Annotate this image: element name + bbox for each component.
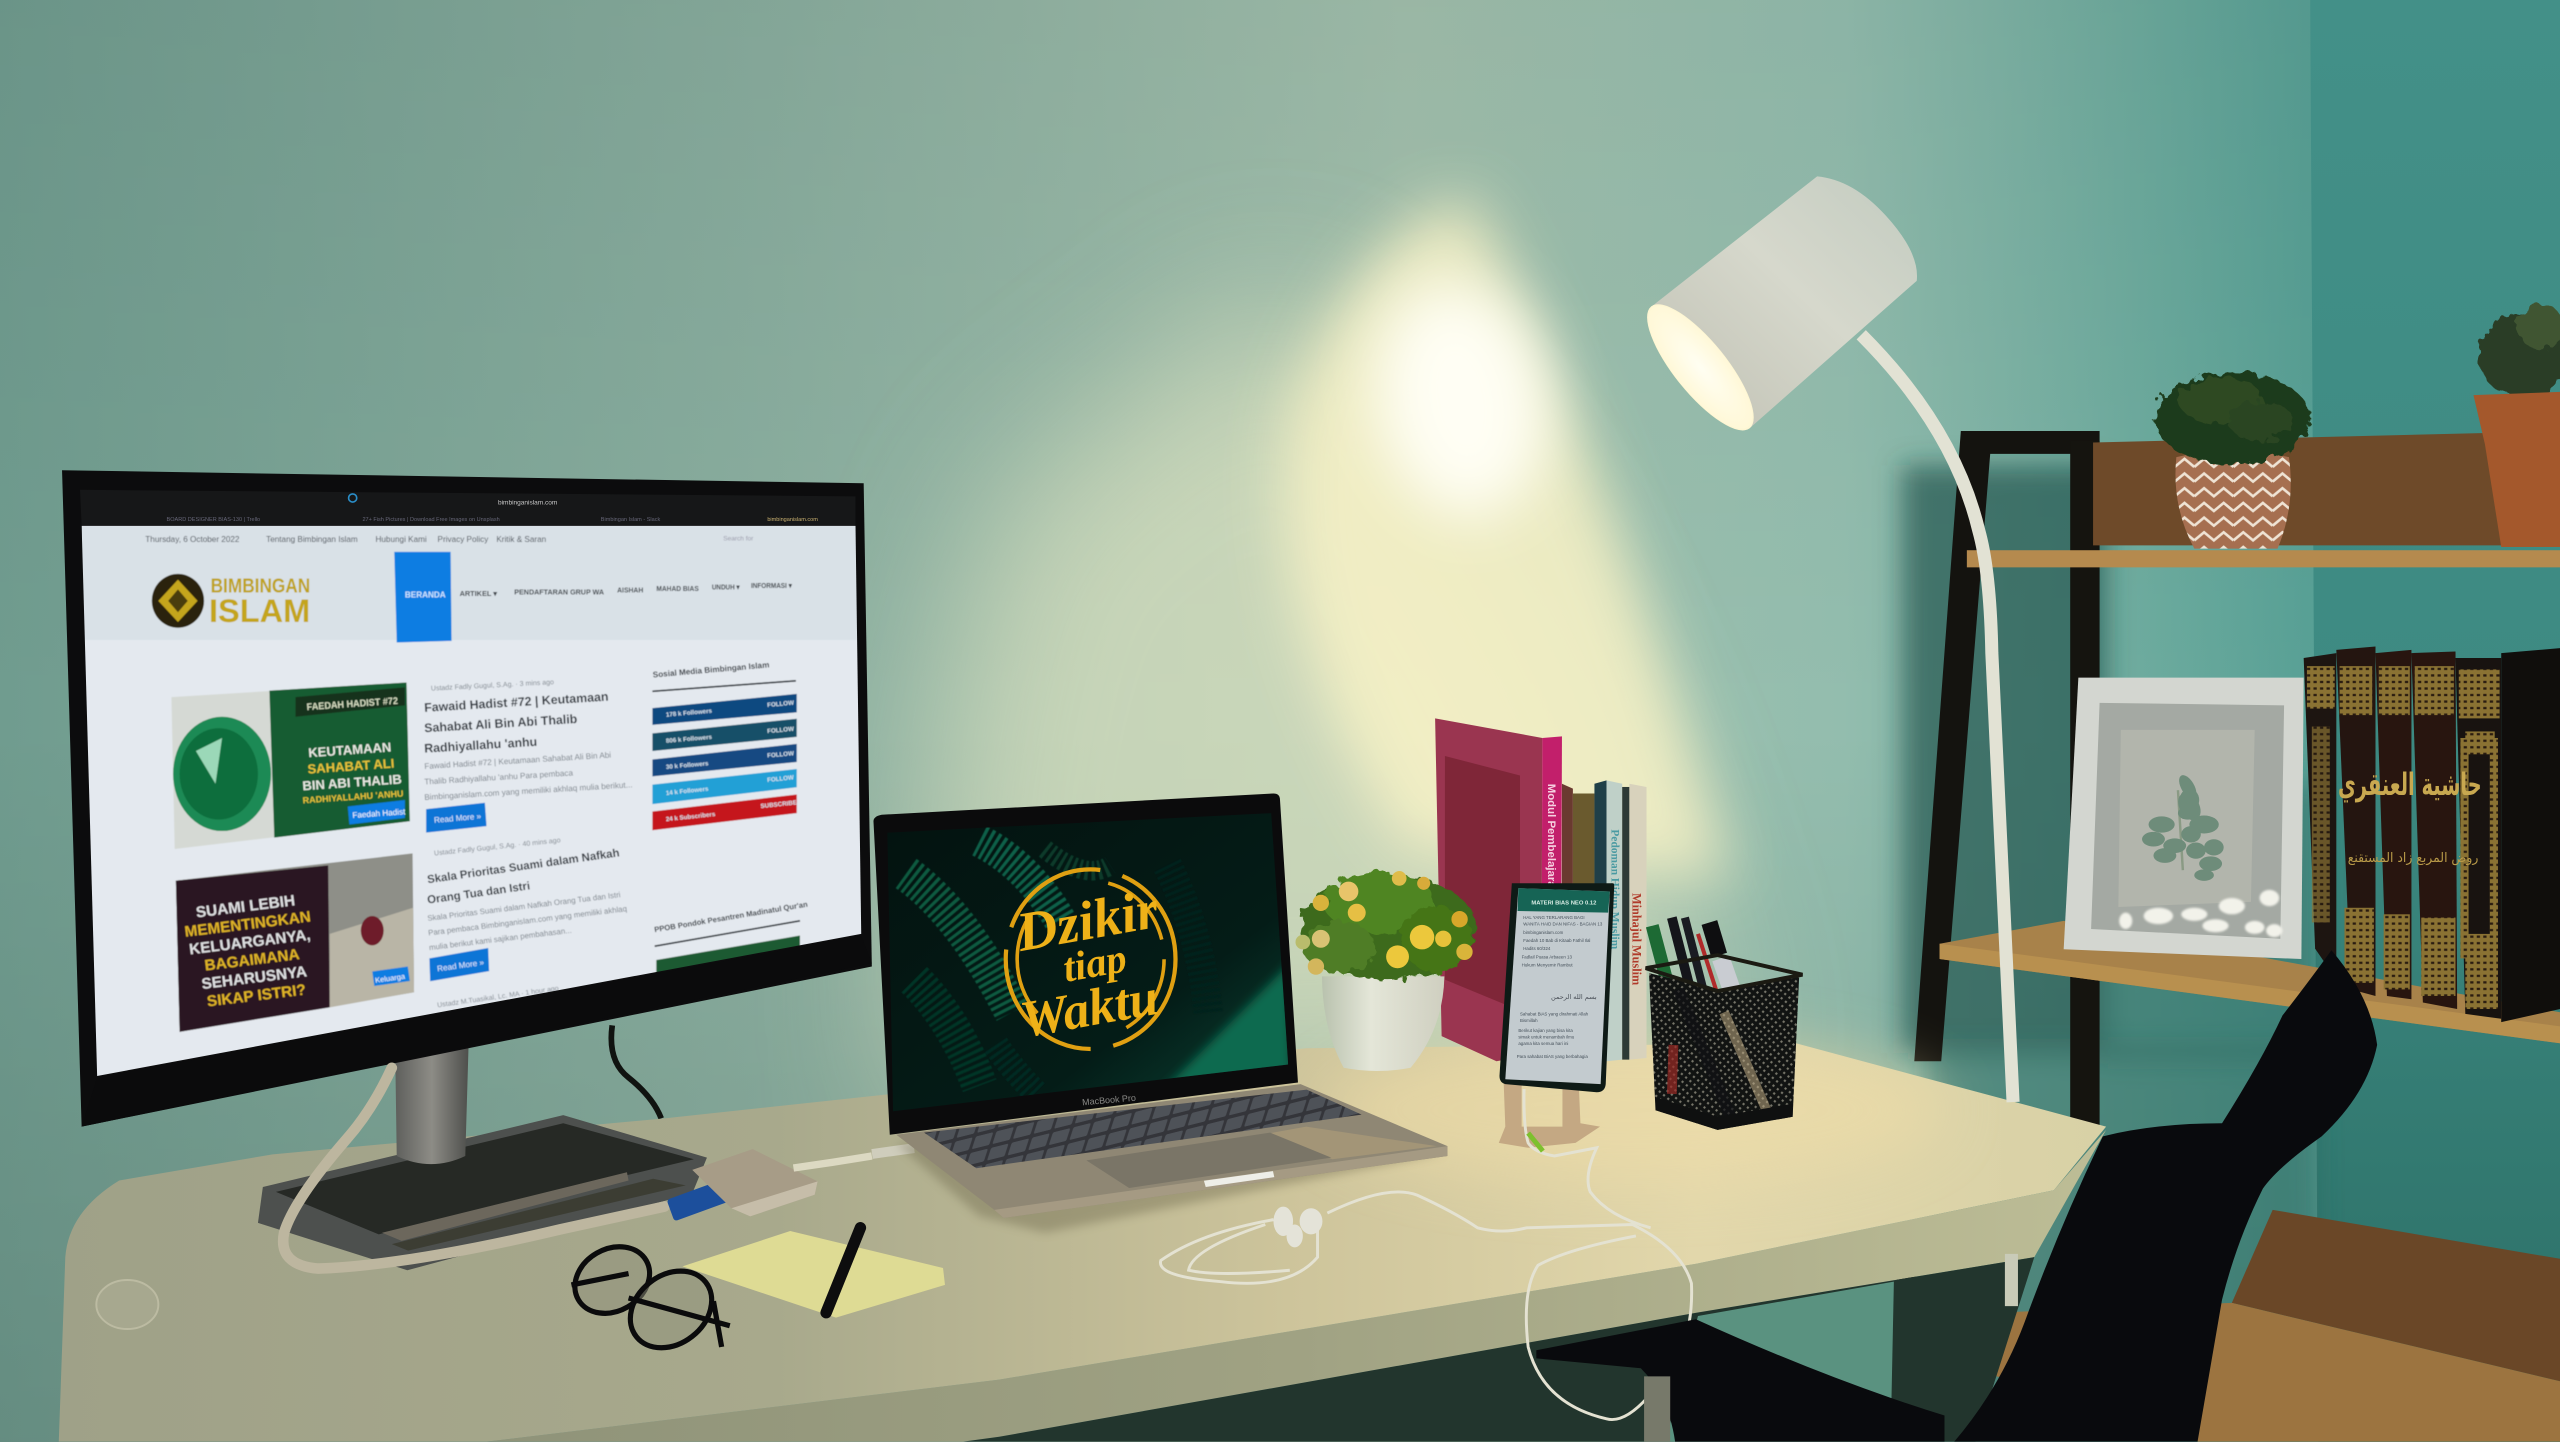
- social media sidebar: FOLLOW: [767, 750, 794, 760]
- keyboard: [924, 1090, 1362, 1168]
- chat text: [1517, 915, 1603, 1059]
- window light spots: [2119, 890, 2282, 937]
- nav: [460, 582, 792, 596]
- nav: UNDUH ▾: [712, 582, 740, 591]
- side wall corner: [2310, 0, 2560, 1442]
- desk warm light: [1322, 1037, 1943, 1184]
- article 2 image: Keluarga: [375, 972, 406, 985]
- laptop base: [896, 1084, 1448, 1218]
- article 1 text: Radhiyallahu 'anhu: [424, 735, 538, 756]
- article 1 image: FAEDAH HADIST #72: [306, 696, 399, 713]
- social media sidebar: 806 k Followers: [666, 734, 713, 745]
- browser toolbar: [80, 490, 856, 526]
- lower frame legs: [1889, 1277, 1930, 1388]
- fern fronds: [906, 841, 1208, 1094]
- web page: BERANDA: [405, 591, 446, 600]
- dzikir tiap waktu logo: tiap: [1060, 935, 1130, 991]
- plant: chevron pot: [2153, 372, 2310, 549]
- article 2 text: [427, 837, 627, 952]
- pens through mesh: [1678, 989, 1731, 1117]
- top bar text: Hubungi Kami: [376, 535, 427, 544]
- chat text: Para sahabat BiAS yang berbahagia: [1517, 1054, 1588, 1059]
- article 1 text: [424, 679, 633, 802]
- office chair: [1536, 950, 2377, 1442]
- monitor stand: [258, 1045, 707, 1270]
- cable grommet: [96, 1280, 158, 1329]
- terracotta pot: [2473, 392, 2560, 547]
- glasses: [563, 1234, 730, 1364]
- phone stand: [1499, 1082, 1600, 1148]
- shelf frame: left leg: [1914, 431, 2100, 1061]
- article 2 text: Para pembaca Bimbinganislam.com yang memiliki akhlaq: [428, 904, 627, 938]
- mesh cup: [1649, 973, 1799, 1130]
- spine titles: Pedoman Hidup Muslim: [1608, 829, 1620, 950]
- chat text: Hukum Menyemir Rambut: [1522, 963, 1573, 968]
- phone and earphone cables: [1160, 1089, 1692, 1420]
- stack of books: Minhajul Muslim: [1630, 893, 1644, 985]
- monitor: [62, 470, 882, 1127]
- article 1 image: Faedah Hadist: [352, 807, 406, 820]
- chat text: simak untuk menambah ilmu: [1518, 1034, 1575, 1039]
- flowers: [1296, 871, 1473, 975]
- plant: succulent in terracotta pot: [2473, 304, 2560, 547]
- desk front edge: [487, 1130, 2106, 1442]
- blurred leaf lower right: [1143, 963, 1290, 1110]
- trackpad: [1086, 1133, 1331, 1188]
- monitor: bimbinganislam.com: [767, 517, 818, 523]
- top bar text: Tentang Bimbingan Islam: [266, 535, 358, 544]
- frame shadow on wall: [1902, 465, 2320, 1437]
- shelf frame: right post: [2070, 441, 2100, 1127]
- wallpaper: [873, 800, 1298, 1127]
- gold ornaments: [2307, 666, 2500, 1009]
- slipcase: [2501, 648, 2560, 1022]
- hub body: [692, 1149, 818, 1216]
- article 2 image: SUAMI LEBIH: [195, 892, 296, 921]
- social media sidebar: 30 k Followers: [666, 760, 709, 771]
- toolbar text: bimbinganislam.com: [498, 500, 557, 507]
- arabic book set: روض المربع زاد المستقنع: [2348, 851, 2478, 866]
- nav: ARTIKEL ▾: [460, 589, 497, 598]
- article 1 text: Thalib Radhiyallahu 'anhu Para pembaca: [424, 768, 574, 787]
- article 2 text: mulia berikut kami sajikan pembahasan...: [429, 926, 572, 952]
- top bar text: Privacy Policy: [438, 535, 489, 544]
- macbook label: MacBook Pro: [1082, 1093, 1136, 1107]
- monitor: Bimbingan Islam - Slack: [601, 517, 661, 523]
- green plug: [1528, 1133, 1543, 1151]
- front notch: [1204, 1171, 1274, 1187]
- dzikir tiap waktu logo: Waktu: [1016, 968, 1162, 1049]
- article 1 text: Ustadz Fadly Gugul, S.Ag. · 3 mins ago: [431, 679, 554, 693]
- chat text: Sahabat BiAS yang dirahmati Allah: [1520, 1012, 1589, 1017]
- logo: ISLAM: [209, 592, 310, 629]
- hub cable: [793, 1156, 872, 1168]
- lower shelf: [2232, 1210, 2560, 1381]
- social media sidebar: FOLLOW: [767, 774, 794, 784]
- dzikir tiap waktu logo: Dzikir: [1011, 879, 1163, 964]
- logo: BIMBINGAN: [211, 576, 310, 598]
- article 2 image: SIKAP ISTRI?: [206, 982, 307, 1011]
- article 1 text: Fawaid Hadist #72 | Keutamaan Sahabat Ali Bin Abi: [424, 751, 612, 771]
- article 2 text: Orang Tua dan Istri: [427, 880, 531, 907]
- social media sidebar: Sosial Media Bimbingan Islam: [652, 660, 770, 680]
- chat text: Bismillah: [1520, 1018, 1538, 1023]
- chair post: [1644, 1376, 1670, 1442]
- pens: [1652, 926, 1682, 1037]
- nav: INFORMASI ▾: [751, 581, 792, 590]
- laptop shadow: [896, 1143, 1447, 1233]
- web page: Ustadz M.Tuasikal, Lc. MA · 1 hour ago: [437, 985, 559, 1009]
- nav: MAHAD BIAS: [656, 584, 699, 593]
- sticky note: [682, 1231, 945, 1318]
- monitor braided cable: [283, 1068, 664, 1269]
- article 2 image: BAGAIMANA: [204, 946, 300, 975]
- red book cover: [1435, 718, 1542, 1061]
- article 1 text: Bimbinganislam.com yang memiliki akhlaq mulia berikut...: [424, 780, 633, 802]
- web page: [65, 514, 882, 1086]
- social media sidebar: 14 k Followers: [666, 786, 709, 797]
- picture frame: [2064, 678, 2304, 959]
- phone: MATERI BIAS NEO 0.12: [1531, 901, 1597, 907]
- lamp shade: [1651, 176, 1917, 428]
- social media sidebar: 178 k Followers: [666, 708, 713, 719]
- chat text: agama kita semua hari ini: [1518, 1041, 1568, 1046]
- arabic book set: [2304, 647, 2560, 1022]
- article 2 image: SEHARUSNYA: [201, 963, 308, 993]
- article 2 text: Ustadz Fadly Gugul, S.Ag. · 40 mins ago: [434, 837, 561, 858]
- chat text: HAL YANG TERLARANG BAGI: [1523, 915, 1585, 920]
- active nav button: [394, 552, 452, 642]
- pen holder: [1646, 918, 1802, 1130]
- chair back: [1954, 950, 2377, 1442]
- chat text: WANITA HAID DAN NIFAS - BAGIAN 13: [1523, 922, 1603, 927]
- laptop: [873, 793, 1448, 1233]
- bookshelf: [1889, 431, 2560, 1442]
- monitor bezel: [62, 470, 872, 1127]
- top bar text: Search for: [723, 535, 754, 542]
- monitor: 27+ Fish Pictures | Download Free Images on Unsplash: [362, 517, 500, 523]
- chat text: Faedah 10 Bab di Kitaab Fathil Ilal: [1523, 938, 1590, 943]
- succulent: [2478, 304, 2560, 398]
- article 2 image: MEMENTINGKAN: [184, 909, 312, 941]
- lamp light glow on wall: [914, 196, 1731, 1110]
- cup rim: [1646, 955, 1802, 991]
- social media sidebar: 24 k Subscribers: [666, 811, 716, 823]
- nav: PENDAFTARAN GRUP WA: [514, 587, 605, 596]
- chat text: Hadits 60/324: [1523, 946, 1551, 951]
- stack of books: [1435, 718, 1647, 1061]
- social media sidebar: FOLLOW: [767, 700, 794, 709]
- chair arm: [1536, 1319, 1944, 1442]
- ppob widget: [654, 900, 809, 980]
- monitor: BOARD DESIGNER BIAS-130 | Trello: [167, 517, 260, 523]
- lamp opening: [1631, 290, 1770, 445]
- top bar text: Kritik & Saran: [496, 535, 546, 544]
- lamp stem: [1861, 335, 2013, 1102]
- phone: [1499, 883, 1614, 1148]
- foliage: [1300, 872, 1476, 980]
- foliage: [2153, 372, 2310, 464]
- read more button 1: [426, 803, 487, 833]
- article 2 image: KELUARGANYA,: [188, 927, 312, 958]
- stand base: [258, 1115, 707, 1270]
- article 1 image: BIN ABI THALIB: [302, 771, 402, 793]
- cable behind monitor: [611, 1025, 661, 1118]
- social media sidebar: FOLLOW: [767, 726, 794, 735]
- social media sidebar: [652, 660, 797, 830]
- flower plant: [1296, 871, 1476, 1071]
- web page: Read More »: [434, 812, 482, 825]
- top wood back panel: [2093, 433, 2501, 545]
- eucalyptus print: [2142, 772, 2224, 881]
- phone body: [1500, 883, 1614, 1092]
- phone screen: [1505, 888, 1610, 1084]
- stack of books: Modul Pembelajaran: [1545, 784, 1557, 895]
- stand neck: [395, 1045, 469, 1164]
- article 2 text: Skala Prioritas Suami dalam Nafkah: [427, 847, 620, 886]
- book spines: [1562, 784, 1573, 1061]
- monitor bottom strip: [82, 936, 872, 1127]
- earbuds: [1273, 1207, 1322, 1247]
- article 1 image: SAHABAT ALI: [307, 756, 395, 777]
- article 2 image: [176, 853, 414, 1032]
- usb hub: [667, 1143, 915, 1221]
- article 1 image: [171, 682, 410, 849]
- dzikir tiap waktu logo: [1006, 869, 1176, 1049]
- under-desk shadow: [963, 1257, 2034, 1442]
- white vase: [1322, 976, 1444, 1071]
- pot: [2175, 451, 2291, 549]
- chat text: Fadlail Puasa Arbaeen 13: [1522, 954, 1572, 959]
- blue connector: [667, 1178, 736, 1221]
- nav: AISHAH: [617, 586, 643, 595]
- social media sidebar: SUBSCRIBE: [760, 799, 797, 810]
- article 1 text: Fawaid Hadist #72 | Keutamaan: [424, 690, 609, 715]
- top bar text: Thursday, 6 October 2022: [145, 535, 240, 544]
- chat text: Berikut kajian yang bisa kita: [1518, 1028, 1573, 1033]
- chat text: bimbinganislam.com: [1523, 930, 1564, 935]
- logo: [152, 574, 310, 629]
- read more button 2: [429, 948, 489, 981]
- web page: Read More »: [437, 958, 485, 973]
- article 1 image: RADHIYALLAHU 'ANHU: [302, 788, 404, 805]
- middle shelf board: [1940, 921, 2560, 1043]
- article 1 text: Sahabat Ali Bin Abi Thalib: [424, 712, 578, 735]
- lamp: [1631, 176, 2013, 1306]
- volumes: [2304, 653, 2336, 980]
- laptop lid: [873, 793, 1298, 1135]
- pen: [826, 1228, 860, 1313]
- cup base: [1656, 1097, 1793, 1130]
- desk: [59, 1037, 2106, 1442]
- top shelf board: [1967, 550, 2560, 567]
- article 2 text: Skala Prioritas Suami dalam Nafkah Orang Tua dan Istri: [427, 890, 621, 923]
- top bar text: [145, 535, 754, 544]
- ppob widget: PPOB Pondok Pesantren Madinatul Qur'an: [654, 900, 809, 934]
- phone: بسم الله الرحمن: [1551, 993, 1597, 1001]
- article 1 image: KEUTAMAAN: [308, 739, 392, 760]
- red book spine: [1541, 736, 1562, 1061]
- desk top: [59, 1043, 2106, 1442]
